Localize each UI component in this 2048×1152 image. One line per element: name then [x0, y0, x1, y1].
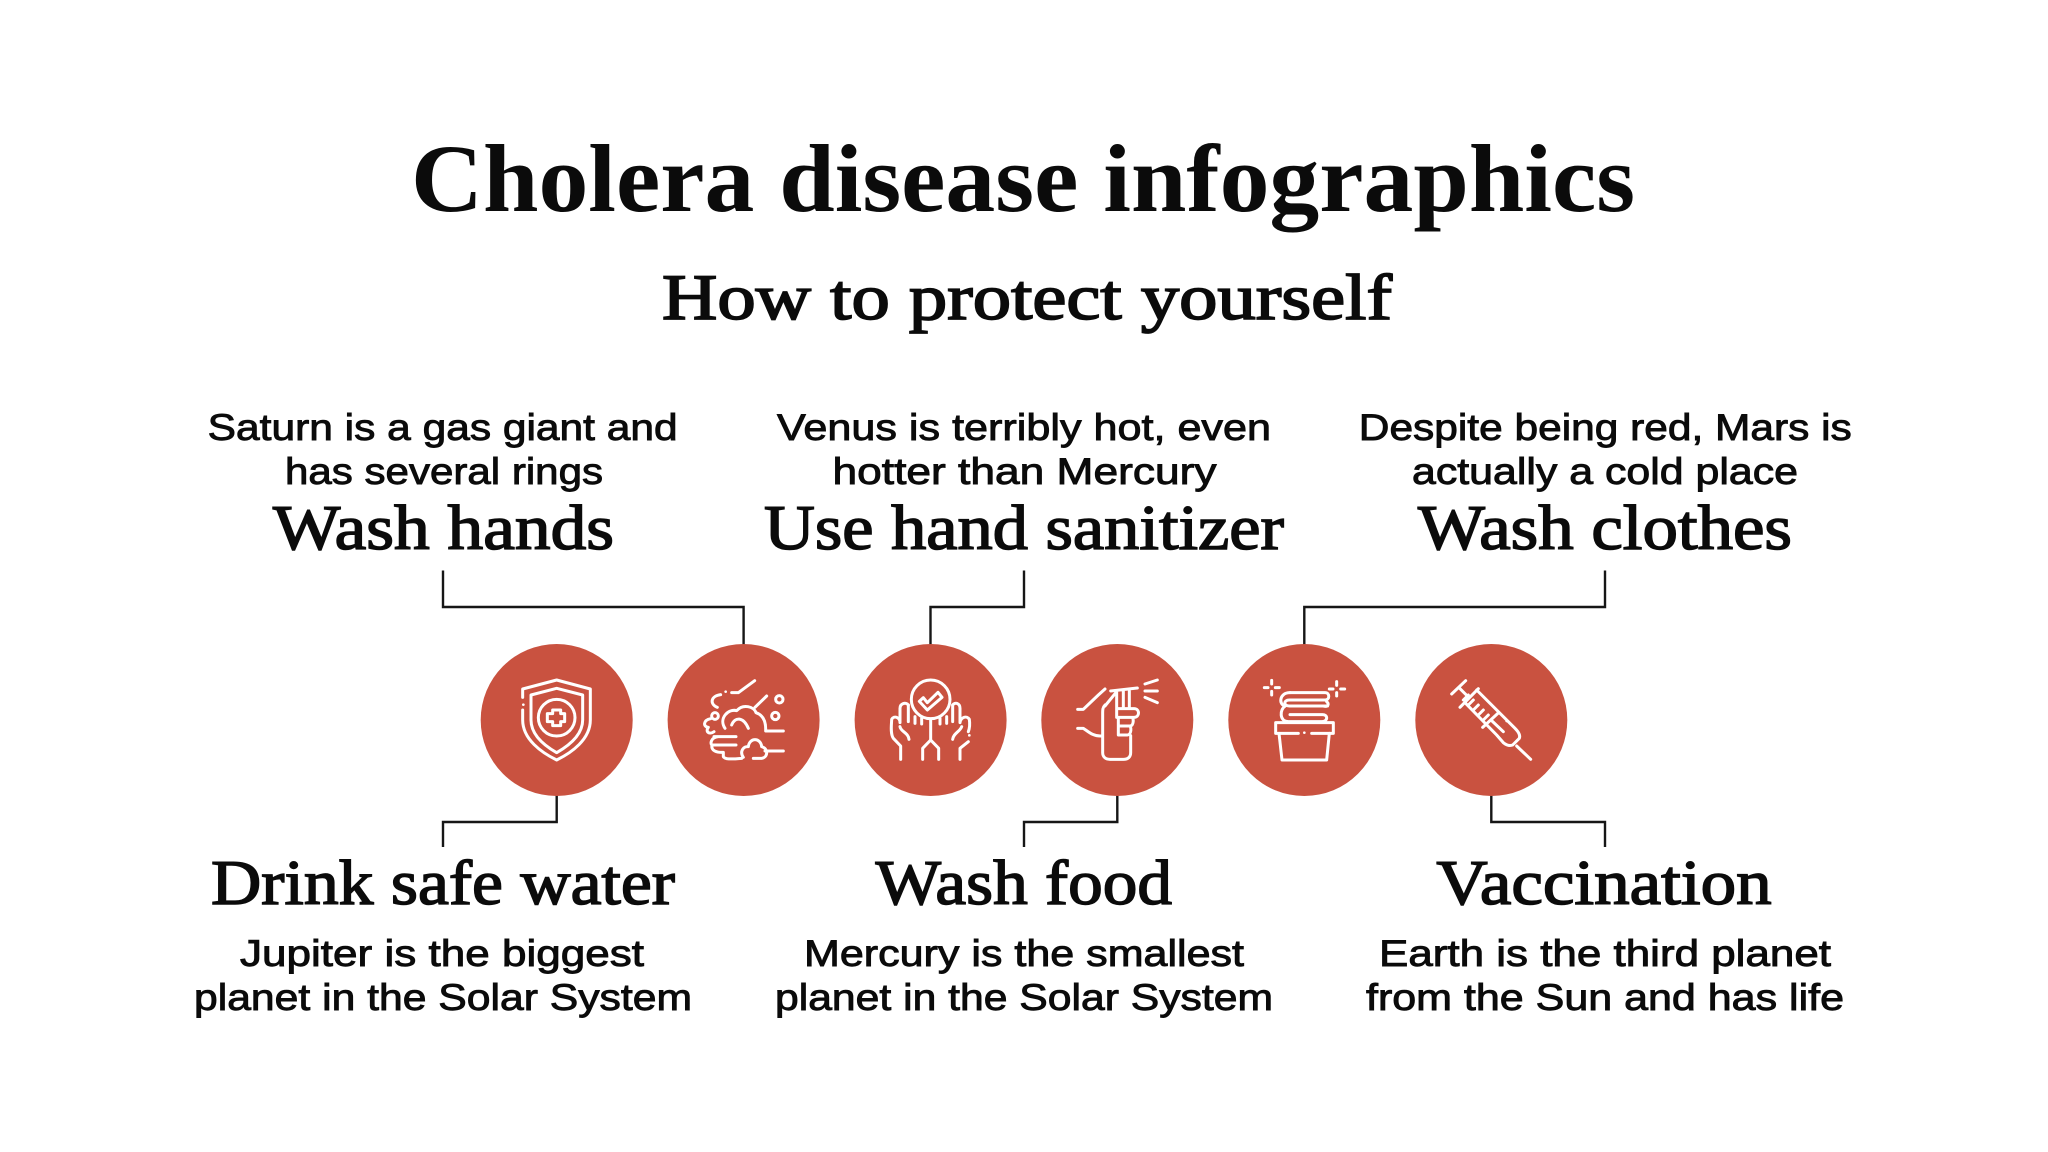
icon: laundry basket with folded clothes — [1228, 644, 1380, 796]
description: wash hands: has several rings — [285, 451, 603, 492]
description: drink safe water — [194, 933, 692, 1018]
icon: washing hands — [668, 644, 820, 796]
panel: use hand sanitizer — [764, 407, 1284, 563]
heading: use hand sanitizer: Use hand sanitizer — [764, 492, 1284, 563]
icon: syringe — [1415, 644, 1567, 796]
heading: wash food: Wash food — [876, 847, 1172, 918]
subtitle: How to protect yourself — [662, 262, 1392, 334]
heading: wash clothes: Wash clothes — [1418, 492, 1792, 563]
description: drink safe water: Jupiter is the biggest — [240, 933, 645, 974]
connector: use hand sanitizer to icon 3 — [930, 570, 1024, 646]
icon: shield with medical cross — [481, 644, 633, 796]
connector: vaccination to icon 6 — [1491, 794, 1605, 847]
heading: drink safe water: Drink safe water — [211, 847, 675, 918]
description: wash clothes — [1359, 407, 1852, 492]
heading: vaccination: Vaccination — [1436, 847, 1772, 918]
panel: wash hands — [208, 407, 678, 563]
description: use hand sanitizer — [777, 407, 1271, 492]
description: wash food — [775, 933, 1273, 1018]
description: use hand sanitizer: hotter than Mercury — [832, 451, 1217, 492]
description: vaccination — [1366, 933, 1844, 1018]
panel: wash food — [775, 847, 1273, 1018]
description: drink safe water: planet in the Solar System — [194, 977, 692, 1018]
panel: drink safe water — [194, 847, 692, 1018]
heading: wash hands: Wash hands — [273, 492, 614, 563]
description: vaccination: Earth is the third planet — [1379, 933, 1832, 974]
connector: wash clothes to icon 5 — [1304, 570, 1605, 646]
description: wash hands: Saturn is a gas giant and — [208, 407, 678, 448]
icon: hands holding checkmark — [855, 644, 1007, 796]
description: wash food: Mercury is the smallest — [804, 933, 1245, 974]
title: Cholera disease infographics — [411, 125, 1635, 232]
description: wash food: planet in the Solar System — [775, 977, 1273, 1018]
panel: wash clothes — [1359, 407, 1852, 563]
connector: drink safe water to icon 1 — [443, 794, 557, 847]
panel: vaccination — [1366, 847, 1844, 1018]
connector: wash food to icon 4 — [1024, 794, 1117, 847]
description: use hand sanitizer: Venus is terribly hot, even — [777, 407, 1271, 448]
description: vaccination: from the Sun and has life — [1366, 977, 1844, 1018]
description: wash clothes: Despite being red, Mars is — [1359, 407, 1852, 448]
description: wash clothes: actually a cold place — [1412, 451, 1798, 492]
icon: spray bottle — [1041, 644, 1193, 796]
description: wash hands — [208, 407, 678, 492]
connector: wash hands to icon 2 — [443, 570, 744, 646]
